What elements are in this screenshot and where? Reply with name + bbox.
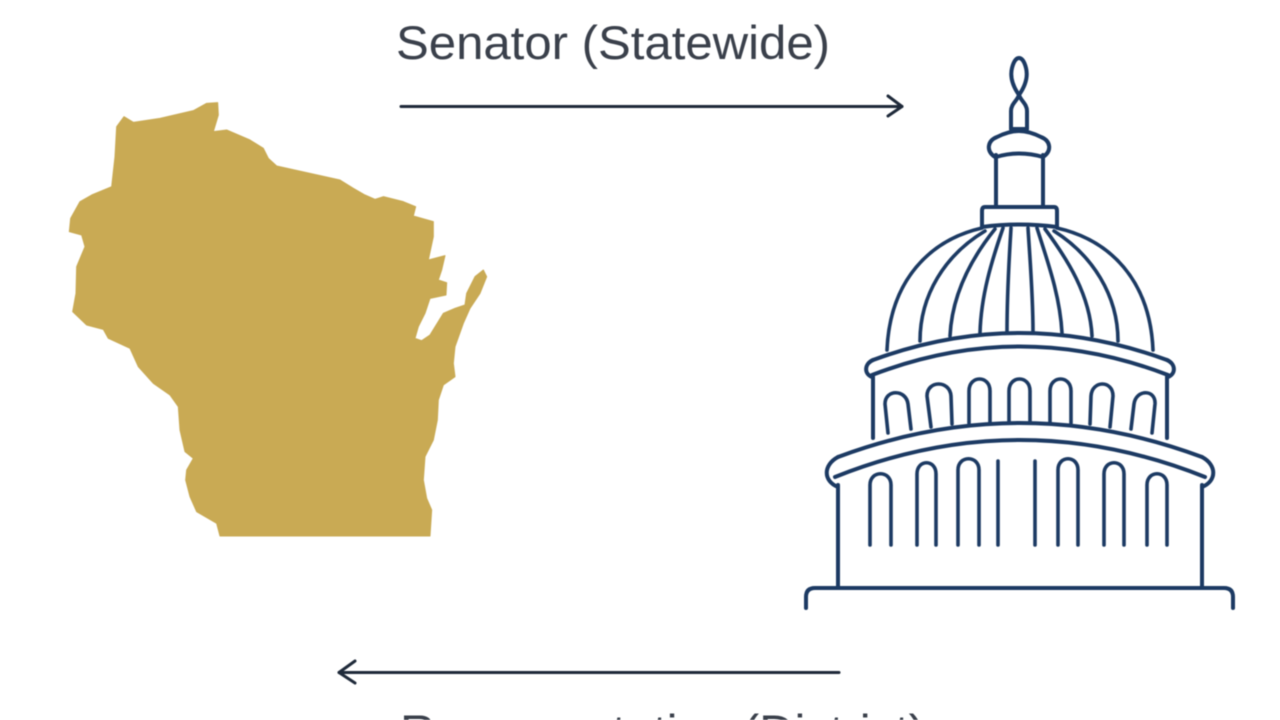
- capitol upper windows: [885, 379, 1155, 433]
- capitol lower windows: [870, 459, 1167, 545]
- icon: capitol building: [806, 58, 1233, 608]
- capitol base: [806, 588, 1233, 608]
- arrow: state to capitol: [401, 96, 902, 116]
- capitol dome ribs: [887, 228, 1153, 350]
- capitol upper band: [866, 333, 1174, 438]
- map: Wisconsin silhouette: [69, 103, 487, 536]
- arrow: capitol to district: [339, 661, 839, 683]
- capitol lantern and drum: [982, 131, 1057, 227]
- heading: Senator (Statewide): Senator (Statewide): [396, 16, 830, 69]
- capitol finial: [1011, 58, 1027, 129]
- capitol lower band: [827, 423, 1213, 587]
